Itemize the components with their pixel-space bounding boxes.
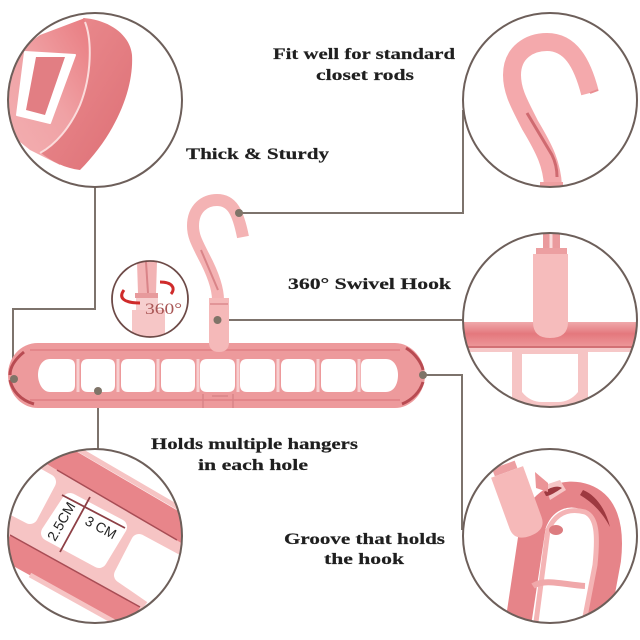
circle: hole dimensions close-up: 3 CM	[83, 513, 119, 542]
circle: swivel close-up	[460, 233, 640, 410]
hanger bar	[8, 343, 425, 408]
swivel body	[209, 298, 229, 352]
red rotation arrows	[122, 282, 173, 303]
heading: 360 swivel hook: 360° Swivel Hook	[288, 276, 451, 293]
heading: thick and sturdy: Thick & Sturdy	[186, 146, 329, 163]
heading: fit well for standard closet rods: Fit well for standard	[273, 46, 455, 63]
360 degree label: 360°	[145, 301, 182, 318]
heading: fit well for standard closet rods: closet rods	[316, 67, 414, 84]
hanger illustration	[8, 200, 425, 408]
dots on connector ends	[10, 209, 427, 395]
dimension labels: 2.5CM	[44, 499, 79, 544]
circle: hole dimensions close-up	[7, 448, 183, 624]
circle: hook close-up	[463, 13, 637, 187]
heading: groove that holds the hook: the hook	[324, 551, 404, 568]
heading: holds multiple hangers in each hole: Holds multiple hangers	[151, 436, 358, 453]
heading: holds multiple hangers in each hole: in each hole	[198, 457, 308, 474]
hook	[193, 200, 243, 300]
circle: 360 degree swivel inset	[112, 261, 188, 338]
heading: groove that holds the hook: Groove that holds	[284, 531, 445, 548]
circle: groove close-up	[463, 449, 637, 625]
connector lines	[13, 110, 463, 530]
circle: thick and sturdy detail	[5, 13, 182, 187]
